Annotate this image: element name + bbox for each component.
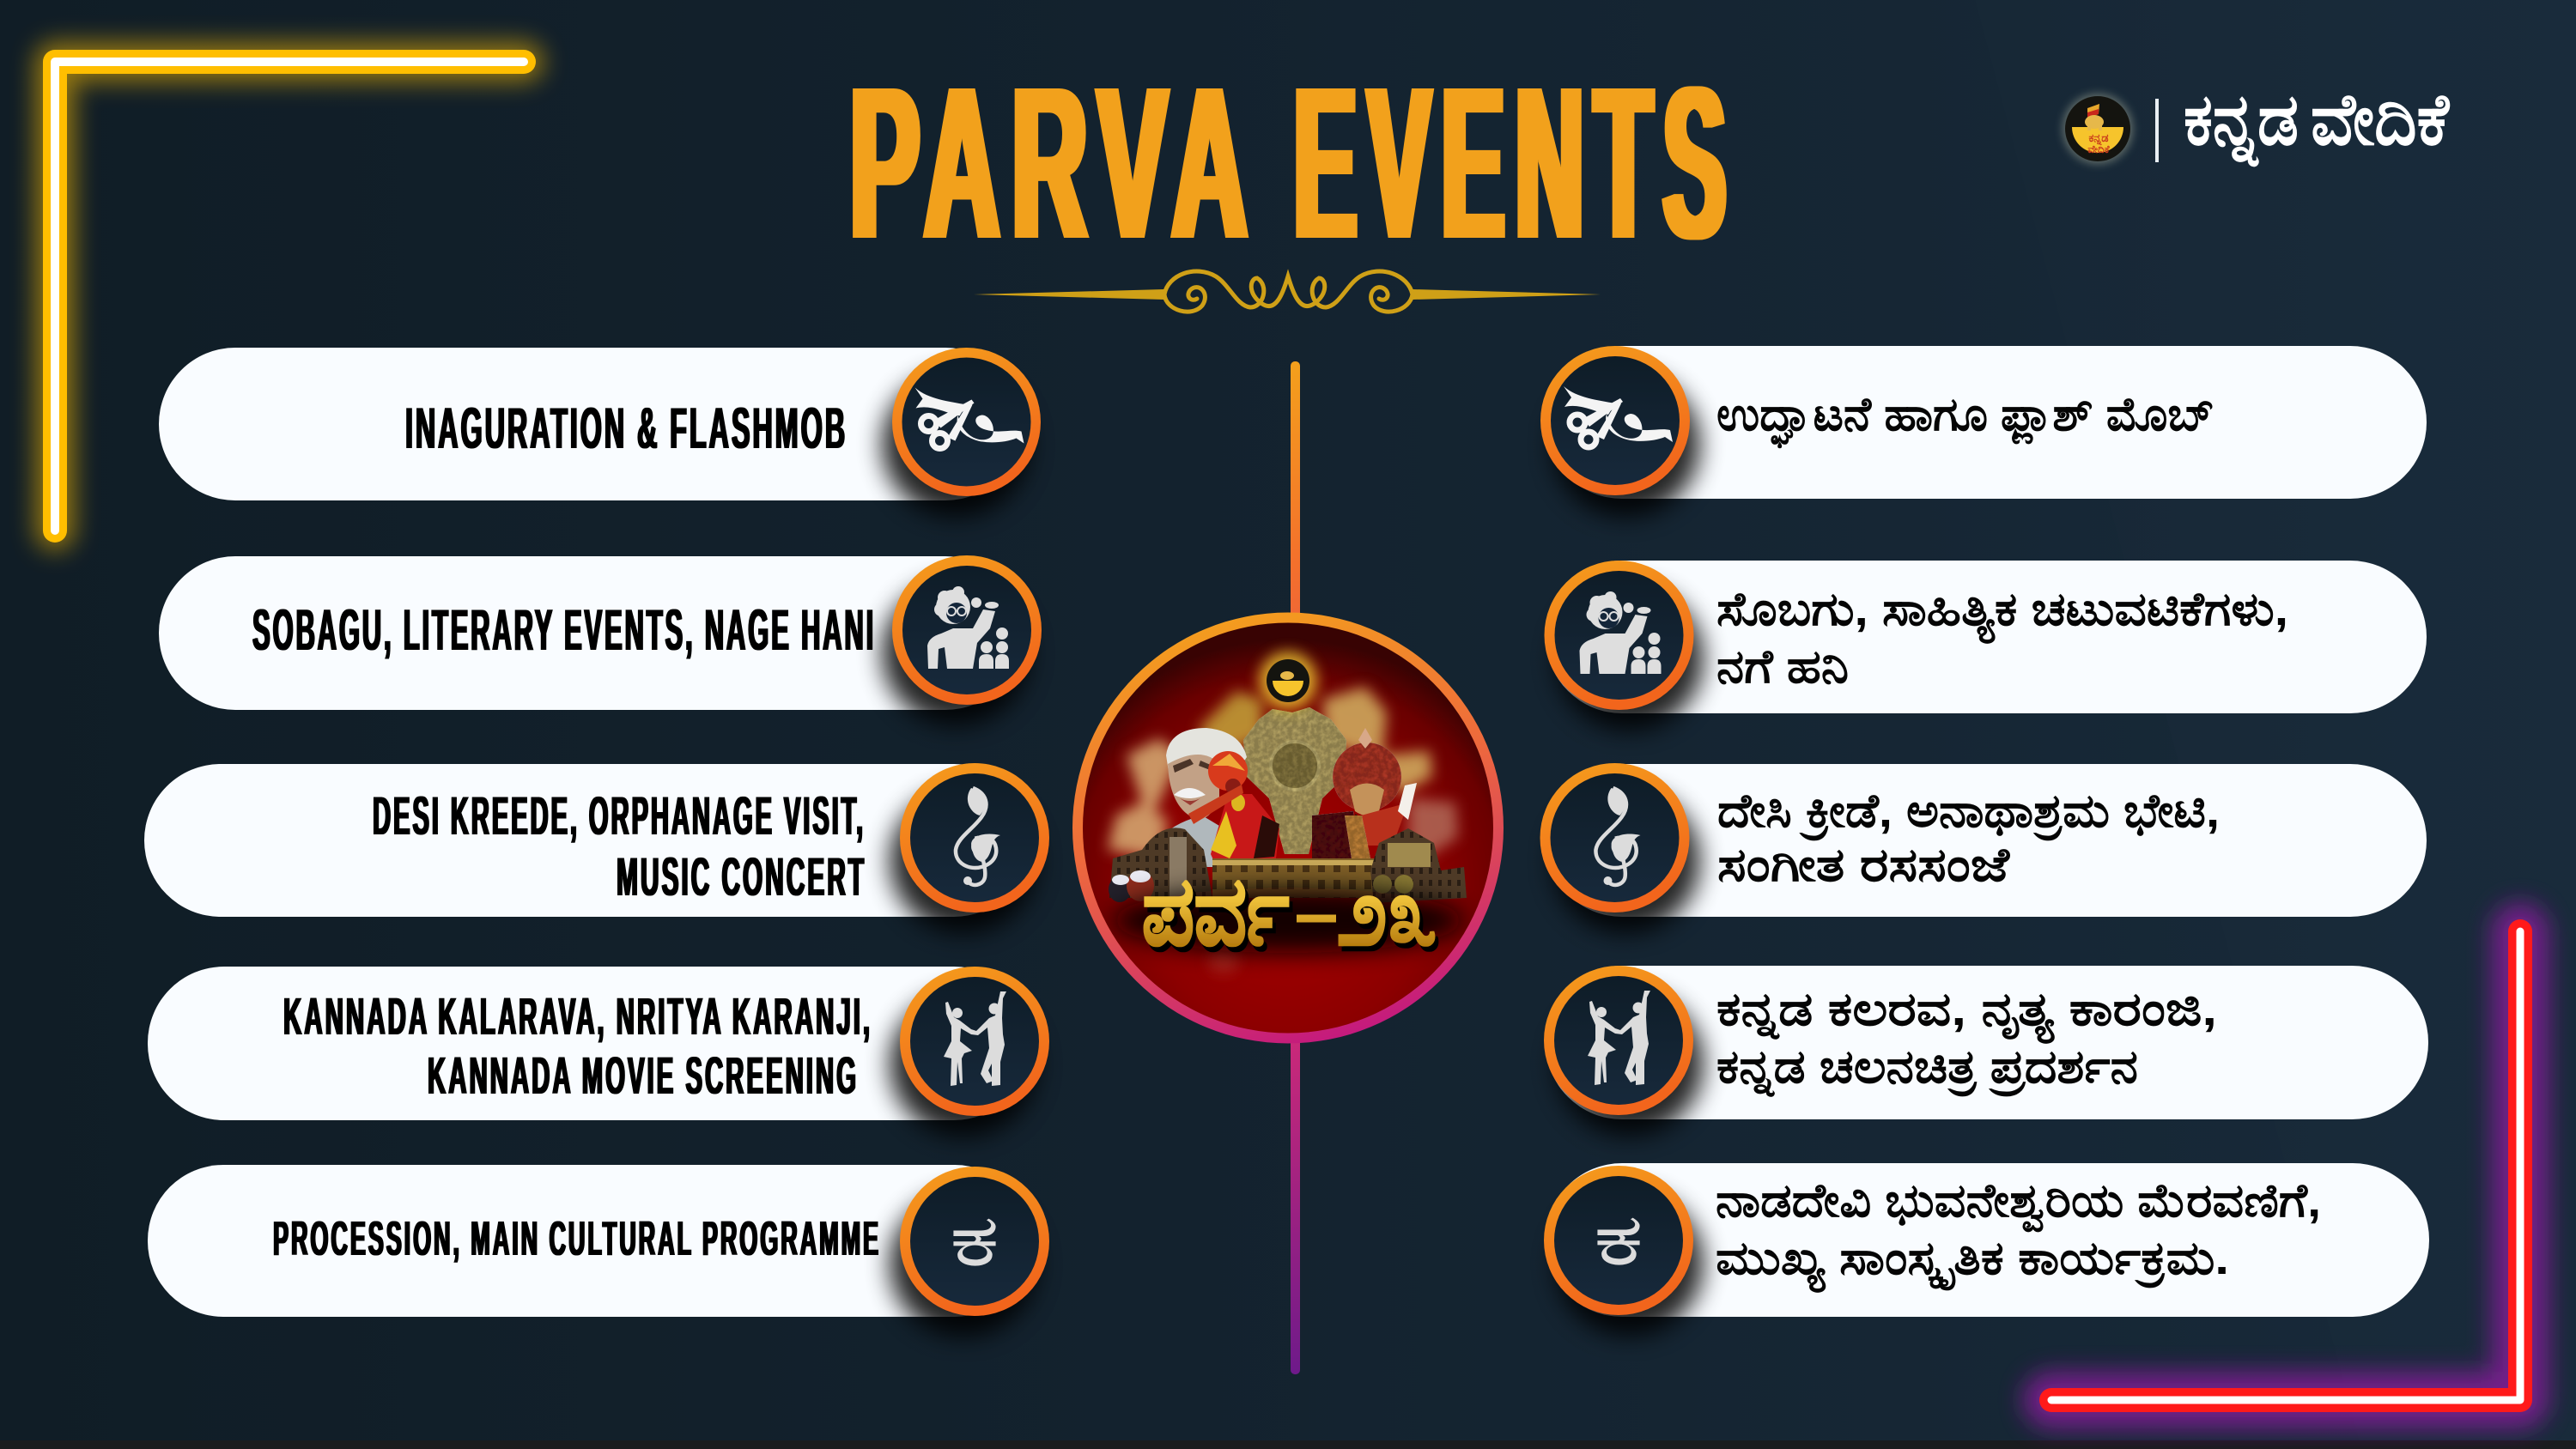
- label: ಮುಖ್ಯ ಸಾಂಸ್ಕೃತಿಕ ಕಾರ್ಯಕ್ರಮ.: [1716, 1233, 2229, 1293]
- right row 5: [1544, 1163, 2429, 1336]
- label: ಕನ್ನಡ ಚಲನಚಿತ್ರ ಪ್ರದರ್ಶನ: [1716, 1041, 2138, 1097]
- left row 4: [148, 967, 1049, 1137]
- left row 3: [144, 763, 1049, 933]
- left row 1: INAGURATION & FLASHMOB: [405, 396, 848, 461]
- right row 2: [1544, 561, 2427, 731]
- small emblem: [1259, 652, 1317, 710]
- label: [1716, 1175, 2321, 1293]
- left row 4: KANNADA MOVIE SCREENING: [428, 1046, 859, 1105]
- yakshagana dancer: [1188, 751, 1279, 862]
- label: ಸಂಗೀತ ರಸಸಂಜೆ: [1717, 840, 2010, 891]
- festival wordmark: ೨೩: [1340, 863, 1441, 970]
- icon: treble clef: [1540, 763, 1690, 912]
- festival wordmark shadow band: [1112, 888, 1464, 953]
- logo wordmark: [2184, 79, 2450, 167]
- icon: ribbon cutting: [1540, 346, 1690, 495]
- icon: Kannada letter: [900, 1167, 1049, 1316]
- right row 4: [1544, 966, 2428, 1136]
- festival wordmark: ಪರ್ವ: [1142, 858, 1289, 965]
- palace and temples: [1109, 828, 1467, 903]
- icon: dancers: [900, 967, 1049, 1116]
- festival wordmark: ಪರ್ವ: [1145, 863, 1292, 970]
- left row 3: MUSIC CONCERT: [617, 847, 866, 907]
- neon corner: red bottom-right: [2051, 931, 2520, 1400]
- icon: Kannada letter: [1544, 1166, 1693, 1315]
- logo emblem: ವೇದಿಕೆ: [2087, 143, 2110, 155]
- festival wordmark: ೨೩: [1337, 858, 1437, 965]
- icon: comedian: [1544, 561, 1693, 710]
- label: [1717, 785, 2220, 891]
- left row 3: DESI KREEDE, ORPHANAGE VISIT,: [373, 786, 866, 846]
- label: [1716, 984, 2217, 1097]
- festival wordmark: [1144, 880, 1439, 953]
- logo wordmark: ವೇದಿಕೆ: [2311, 79, 2450, 160]
- left row 2: SOBAGU, LITERARY EVENTS, NAGE HANI: [252, 597, 876, 663]
- icon: Kannada letter: ಕ: [1593, 1199, 1644, 1280]
- label: [1716, 584, 2288, 693]
- icon: ribbon cutting: [892, 348, 1041, 496]
- logo emblem: ಕನ್ನಡ: [2088, 131, 2109, 146]
- icon: Kannada letter: ಕ: [949, 1200, 1000, 1281]
- label: [283, 987, 872, 1105]
- title: PARVA: [850, 41, 1260, 284]
- neon corner: yellow top-left: [55, 62, 524, 530]
- icon: treble clef: [900, 763, 1049, 912]
- label: ನಾಡದೇವಿ ಭುವನೇಶ್ವರಿಯ ಮೆರವಣಿಗೆ,: [1716, 1175, 2321, 1233]
- right row 3: [1540, 763, 2427, 933]
- gold ornament: [1243, 707, 1346, 854]
- centre emblem: Parva 23: [1072, 613, 1504, 1044]
- title ornament: [974, 271, 1601, 312]
- left row 5: [148, 1165, 1049, 1337]
- logo: Kannada Vedike: [2063, 79, 2450, 167]
- label: ಸೊಬಗು, ಸಾಹಿತ್ಯಿಕ ಚಟುವಟಿಕೆಗಳು,: [1716, 584, 2288, 644]
- label: ಕನ್ನಡ ಕಲರವ, ನೃತ್ಯ ಕಾರಂಜಿ,: [1716, 984, 2217, 1044]
- left row 1: [159, 348, 1041, 517]
- smoke clouds: [1108, 687, 1458, 973]
- left row 4: KANNADA KALARAVA, NRITYA KARANJI,: [283, 987, 872, 1046]
- label: ದೇಸಿ ಕ್ರೀಡೆ, ಅನಾಥಾಶ್ರಮ ಭೇಟಿ,: [1717, 785, 2220, 840]
- label: [373, 786, 866, 907]
- masked performer: [1312, 728, 1417, 858]
- portrait: [1166, 728, 1247, 867]
- logo divider: [2155, 99, 2159, 162]
- icon: comedian: [892, 555, 1042, 705]
- right row 1: [1540, 346, 2427, 517]
- left row 5: PROCESSION, MAIN CULTURAL PROGRAMME: [273, 1211, 881, 1266]
- left row 2: [159, 555, 1042, 725]
- centre vertical line: [1291, 361, 1300, 1374]
- label: ಉದ್ಘಾಟನೆ ಹಾಗೂ ಫ್ಲಾಶ್ ಮೊಬ್: [1716, 389, 2215, 450]
- text: EVENTS: [1294, 41, 1737, 284]
- logo emblem: [2063, 94, 2133, 164]
- icon: dancers: [1544, 966, 1693, 1115]
- logo wordmark: ಕನ್ನಡ: [2184, 79, 2299, 167]
- label: ನಗೆ ಹನಿ: [1716, 641, 1849, 693]
